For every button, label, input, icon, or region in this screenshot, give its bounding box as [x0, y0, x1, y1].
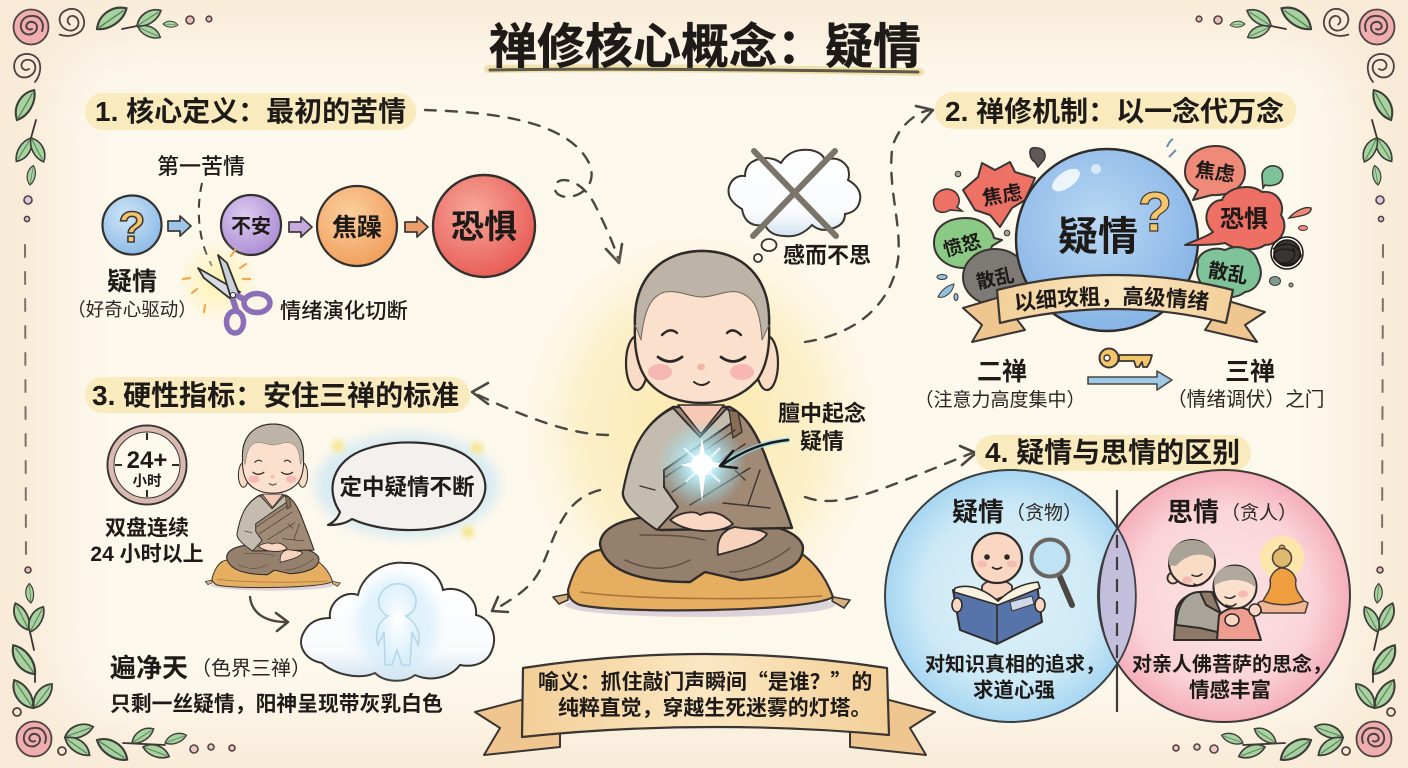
arrow: monk to section 3	[472, 383, 608, 435]
small bubbles left	[934, 148, 1045, 300]
icon: key	[1100, 348, 1152, 368]
label: doubt (objects): 疑情	[952, 497, 1004, 527]
text: longing description: 情感丰富	[1189, 678, 1271, 702]
bubble: anxiety right behind sphere	[1185, 146, 1245, 200]
venn: right circle	[1098, 470, 1350, 722]
icon: 24 hour clock: 24+	[127, 447, 167, 474]
label: second dhyana: 二禅	[977, 358, 1027, 386]
decorative corner: bottom left	[7, 567, 235, 765]
speech bubble: constant doubt	[315, 433, 499, 538]
label: third dhyana: 三禅	[1225, 358, 1275, 386]
label: doubt (objects)	[952, 497, 1082, 527]
bubble: anger: 愤怒	[941, 230, 983, 262]
label: first bitter emotion: 第一苦情	[157, 154, 245, 179]
text: longing description	[1132, 652, 1332, 702]
ribbon: metaphor: 喻义：抓住敲门声瞬间“是谁？”的	[538, 666, 872, 696]
bubble: scattered green	[1197, 247, 1261, 297]
bubble: fear right	[1185, 187, 1284, 249]
icon: child reading with magnifier	[952, 533, 1072, 644]
monk glow	[515, 225, 885, 635]
speech bubble: constant doubt: 定中疑情不断	[339, 475, 475, 500]
icon: glowing heart light	[658, 421, 746, 509]
icon: 24 hour clock	[108, 426, 186, 504]
bubble: anger	[934, 218, 1002, 268]
bubble: fear: 恐惧	[451, 208, 517, 245]
central monk	[553, 251, 866, 617]
label: longing (people): 思情	[1167, 497, 1219, 527]
ribbon: metaphor: 纯粹直觉，穿越生死迷雾的灯塔。	[558, 692, 871, 722]
label: form realm third dhyana: （色界三禅）	[191, 657, 311, 680]
panel: one thought replaces many	[914, 138, 1324, 411]
label: pure heaven: 遍净天	[110, 653, 188, 683]
bubble: anxiety right behind sphere: 焦虑	[1194, 158, 1236, 187]
decorative corner: bottom right	[1173, 567, 1401, 765]
big sphere with question: ?	[1138, 180, 1172, 243]
small bubbles right	[1167, 139, 1311, 287]
bubble: scattered gray	[963, 249, 1027, 305]
decorative corner: top left	[10, 2, 212, 222]
dashed cut line	[199, 183, 212, 266]
icon: monks embracing and buddha	[1168, 536, 1308, 640]
heading: section 3: 3. 硬性指标：安住三禅的标准	[92, 380, 459, 411]
ribbon: metaphor	[475, 654, 935, 755]
venn: overlap	[1099, 528, 1136, 664]
icon: small monk	[205, 424, 340, 591]
label: longing (people): （贪人）	[1221, 502, 1297, 524]
label: heart center thought	[778, 401, 866, 454]
icon: 24 hour clock: 小时	[132, 473, 162, 490]
bubble: doubt	[102, 196, 162, 254]
bubble: agitation	[317, 186, 397, 266]
panel: hard metric	[90, 424, 499, 716]
label: heart center thought: 膻中起念	[778, 401, 866, 426]
bubble: scattered green: 散乱	[1206, 259, 1250, 288]
label: doubt: 疑情	[107, 268, 157, 296]
icon: scribble	[1271, 237, 1303, 269]
arrow: section 1 to monk	[425, 110, 622, 263]
panel: emotion chain	[67, 154, 535, 333]
arrow: blue	[168, 216, 191, 236]
label: emotion subdued gate: （情绪调伏）之门	[1167, 389, 1324, 411]
label: emotional evolution cut: 情绪演化切断	[280, 299, 408, 323]
label: double lotus: 双盘连续	[105, 517, 189, 540]
big sphere with question	[1016, 149, 1198, 331]
label: longing (people)	[1167, 497, 1297, 527]
label: 24 hours: 24 小时以上	[90, 543, 204, 566]
text: doubt description: 对知识真相的追求，	[925, 652, 1105, 676]
arrow: monk to section 2	[805, 106, 933, 342]
label: pure heaven description: 只剩一丝疑情，阳神呈现带灰乳白色	[110, 692, 443, 716]
ribbon: subtle attacks coarse: 以细攻粗，高级情绪	[1016, 286, 1209, 312]
text: doubt description: 求道心强	[973, 679, 1055, 702]
bubble: doubt: ?	[119, 203, 145, 252]
venn: left circle	[885, 470, 1137, 722]
panel: venn comparison	[885, 470, 1350, 722]
heading: section 1: 1. 核心定义：最初的苦情	[95, 96, 406, 127]
arrow: monk to section 4	[805, 446, 976, 501]
label: doubt (objects): （贪物）	[1006, 502, 1082, 524]
label: heart center thought: 疑情	[800, 429, 844, 454]
bubble: unease	[221, 195, 281, 255]
text: doubt description	[925, 652, 1105, 702]
big sphere with question: 疑情	[1058, 215, 1138, 259]
icon: crossed out thought cloud	[729, 150, 860, 262]
text: longing description: 对亲人佛菩萨的思念，	[1132, 652, 1332, 676]
heading: section 2: 2. 禅修机制：以一念代万念	[945, 95, 1284, 127]
bubble: anxiety spiky	[963, 162, 1035, 227]
title: 禅修核心概念：疑情	[489, 21, 921, 74]
heading: section 4: 4. 疑情与思情的区别	[985, 437, 1240, 468]
icon: scissors	[176, 240, 270, 333]
arrow: to heart light	[720, 440, 788, 468]
bubble: fear	[433, 175, 535, 277]
arrow: purple	[289, 217, 312, 237]
bubble: unease: 不安	[231, 215, 271, 238]
label: feel without thinking: 感而不思	[783, 243, 871, 268]
arrow: second to third dhyana	[1088, 371, 1172, 390]
ribbon: subtle attacks coarse	[962, 274, 1266, 343]
arrow: monk to cloud body	[250, 597, 288, 631]
decorative corner: top right	[1196, 2, 1398, 222]
icon: glowing spirit cloud	[301, 563, 494, 681]
label: attention focused: （注意力高度集中）	[914, 389, 1086, 411]
arrow: monk to cloud	[492, 490, 600, 612]
arrow: orange	[405, 217, 428, 237]
label: curiosity driven: （好奇心驱动）	[67, 299, 197, 320]
bubble: fear right: 恐惧	[1220, 206, 1268, 233]
bubble: scattered gray: 散乱	[974, 264, 1016, 294]
bubble: agitation: 焦躁	[332, 214, 382, 242]
bubble: anxiety spiky: 焦虑	[980, 181, 1024, 210]
